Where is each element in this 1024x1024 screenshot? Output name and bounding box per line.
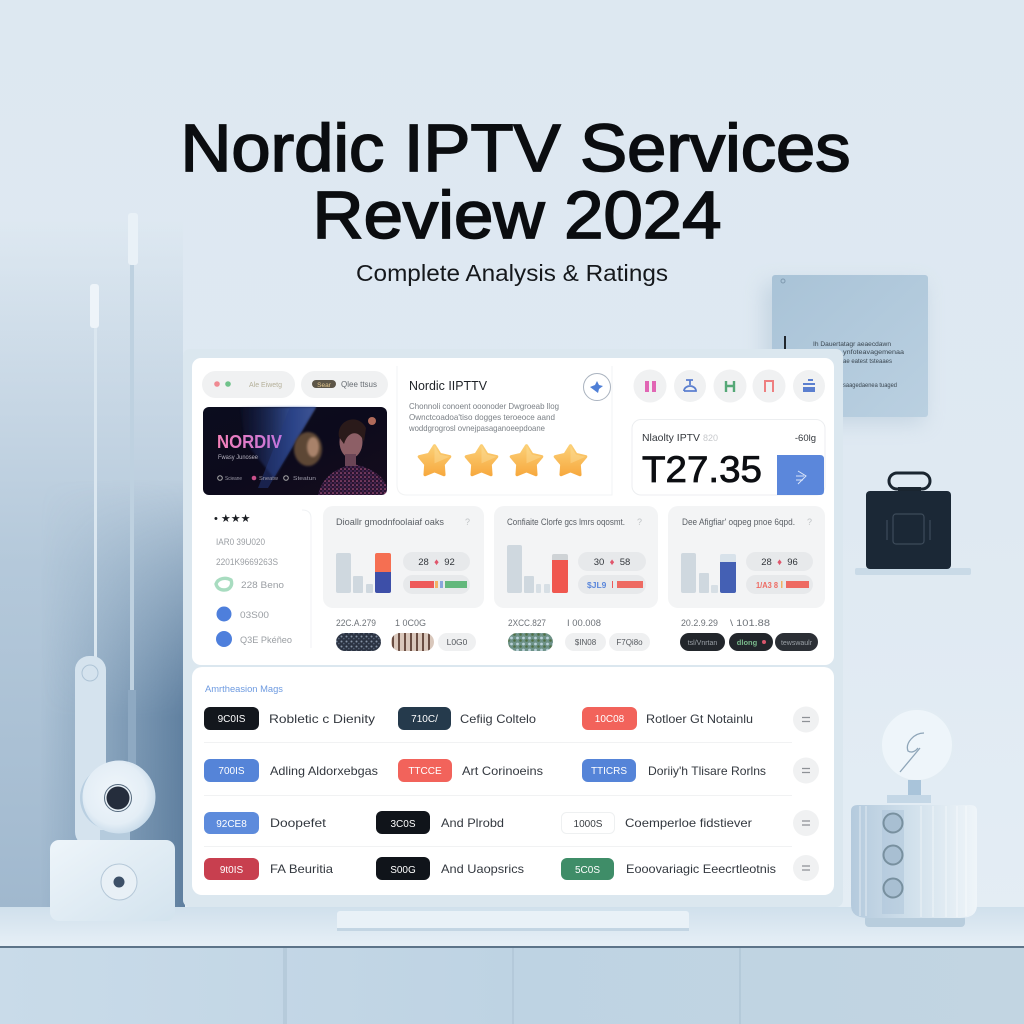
row 4: Eooovariagic Eeecrtleotnis: [626, 862, 776, 876]
wall panel: ae eatest tsteaaes: [843, 358, 893, 365]
chart card 2: ?: [637, 517, 642, 527]
price card: -60lg: [795, 433, 816, 444]
price card: [632, 420, 825, 495]
icon: badge: [584, 374, 610, 400]
chart card 3 footer: tewswaulr: [781, 640, 813, 647]
chart card 3 footer: [680, 618, 818, 651]
card description: woddgrogrosl ovnejpasaganoeepdoane: [408, 423, 545, 433]
top left pills: [202, 371, 388, 398]
bottom list panel: [192, 667, 834, 895]
subtitle: Complete Analysis & Ratings: [356, 260, 668, 286]
chart card 2: $JL9: [587, 580, 607, 590]
row 4: 9t0IS: [220, 865, 244, 876]
chart card 3 footer: dlong: [737, 638, 758, 647]
right dial speaker device: [851, 709, 977, 927]
wall panel: [764, 275, 928, 423]
paddle arm: [75, 656, 106, 846]
chart card 3: 1/A3 8: [756, 580, 778, 590]
arrow button: [777, 455, 824, 495]
row 1: Cefiig Coltelo: [460, 712, 536, 726]
bar chart 1: [336, 553, 391, 593]
webcam: [80, 760, 156, 842]
black device on wall shelf: [855, 473, 971, 575]
price: T27.35: [642, 449, 762, 490]
left camera device: [50, 656, 175, 921]
chart card 2 footer: 2XCC.827: [508, 618, 546, 628]
row 1: 710C/: [411, 714, 438, 725]
base box: [50, 840, 175, 921]
top left pills: Ale Eiwetg: [249, 382, 282, 389]
row 2: Art Corinoeins: [462, 764, 543, 778]
shelf and drawers: [0, 907, 1024, 1024]
row 1: Rotloer Gt Notainlu: [646, 712, 753, 726]
left stats column: IAR0 39U020: [216, 537, 265, 547]
chart card 2 footer: I 00.008: [567, 618, 601, 628]
row 3: [204, 810, 819, 836]
chart card 2 footer: $IN08: [575, 638, 597, 647]
left stats column: 03S00: [240, 610, 269, 620]
poster image: Scieane: [225, 476, 242, 482]
chart card 3: [668, 506, 825, 608]
wall panel: Ih Dauertatagr aeaecdawn: [813, 341, 891, 348]
row 3: Doopefet: [270, 816, 327, 830]
wall panel: ynfoteavagemenaa: [843, 349, 904, 356]
chart card 1: Dioallr gmodnfoolaiaf oaks: [336, 517, 445, 527]
row 2: 700IS: [218, 766, 245, 777]
row 3: 92CE8: [216, 819, 247, 830]
chart card 1: [323, 506, 484, 608]
title: [180, 111, 850, 253]
poster man: [318, 419, 387, 495]
left stats column: 228 Beno: [241, 580, 284, 590]
chart card 3: Dee Afigfiar' oqpeg pnoe 6qpd.: [682, 517, 795, 527]
left stats column: • ★★★: [214, 513, 251, 525]
card description: Ownctcoadoa'tiso dogges teroeoce aand: [409, 412, 555, 422]
bar chart 3: [681, 553, 736, 593]
row 1: [204, 706, 819, 732]
dial: [881, 709, 953, 803]
poster image: [203, 407, 387, 495]
card description: [408, 401, 559, 433]
chart card 3 footer: tsl/Vnrtan: [688, 640, 717, 647]
star rating: [419, 446, 586, 475]
wall panel: saagedaenea tuaged: [843, 382, 897, 389]
row 1: 9C0IS: [218, 714, 246, 725]
row 2: [204, 758, 819, 784]
card heading: Nordic IIPTTV: [409, 378, 487, 393]
title: Review 2024: [312, 178, 722, 253]
price card: Nlaolty IPTV: [642, 432, 700, 444]
chart card 1 footer: [336, 618, 476, 651]
left stats column: 2201K9669263S: [216, 557, 278, 567]
row 2: TTICRS: [591, 766, 627, 777]
chart card 1 footer: 22C.A.279: [336, 618, 376, 628]
row 4: FA Beuritia: [270, 862, 333, 876]
rating card: [397, 366, 612, 495]
row 2: Doriiy'h Tlisare Rorlns: [648, 764, 766, 778]
row 3: And Plrobd: [441, 816, 504, 830]
chart card 3 footer: \ 101.88: [730, 618, 770, 628]
list heading: Amrtheasion Mags: [205, 684, 284, 694]
row 1: 10C08: [595, 714, 625, 725]
row 4: 5C0S: [575, 865, 600, 876]
chart card 2: [494, 506, 658, 608]
chart card 1: 28 ♦ 92: [418, 557, 455, 568]
chart card 3 footer: 20.2.9.29: [681, 618, 718, 628]
left stats column: [214, 510, 311, 648]
chart card 2 footer: F7Qi8o: [616, 638, 643, 647]
card description: Chonnoli conoent ooonoder Dwgroeab llog: [409, 401, 559, 411]
category icon row: [634, 370, 825, 402]
price card: 820: [703, 433, 718, 443]
poster wordmark: NORDIV: [217, 432, 282, 452]
poster woman: [294, 432, 322, 466]
row 1: Robletic c Dienity: [269, 712, 375, 726]
background wall: [0, 272, 185, 907]
row 2: Adling Aldorxebgas: [270, 764, 378, 778]
poster image: Fwasy Junosee: [218, 455, 259, 461]
row 2: TTCCE: [408, 766, 442, 777]
chart card 1: ?: [465, 517, 470, 527]
cylinder base: [851, 805, 977, 927]
poster image: Steatun: [293, 476, 316, 482]
poster image: Sneatw: [259, 476, 278, 482]
top left pills: Sear: [317, 382, 332, 389]
chart card 3: ?: [807, 517, 812, 527]
chart card 2: Confiaite Clorfe gcs lmrs oqosmt.: [507, 517, 625, 527]
row 3: Coemperloe fidstiever: [625, 816, 752, 830]
row 4: [204, 855, 819, 881]
row 4: And Uaopsrics: [441, 862, 524, 876]
monitor frame: [183, 349, 843, 907]
left stats column: Q3E Pkéñeo: [240, 635, 292, 645]
monitor stand: [337, 911, 689, 931]
row 3: 3C0S: [390, 819, 416, 830]
chart card 1 footer: L0G0: [447, 637, 468, 647]
buttons: [884, 814, 902, 898]
bar chart 2: [507, 545, 568, 593]
left antennas: [90, 213, 138, 770]
title: Nordic IPTV Services: [180, 111, 850, 186]
chart card 3: 28 ♦ 96: [761, 557, 798, 568]
chart card 2: 30 ♦ 58: [594, 557, 630, 568]
top left pills: Qlee ttsus: [341, 380, 377, 389]
chart card 1 footer: 1 0C0G: [395, 618, 426, 628]
row 4: S00G: [390, 865, 416, 876]
chart card 2 footer: [508, 618, 650, 651]
row 3: 1000S: [574, 819, 603, 830]
